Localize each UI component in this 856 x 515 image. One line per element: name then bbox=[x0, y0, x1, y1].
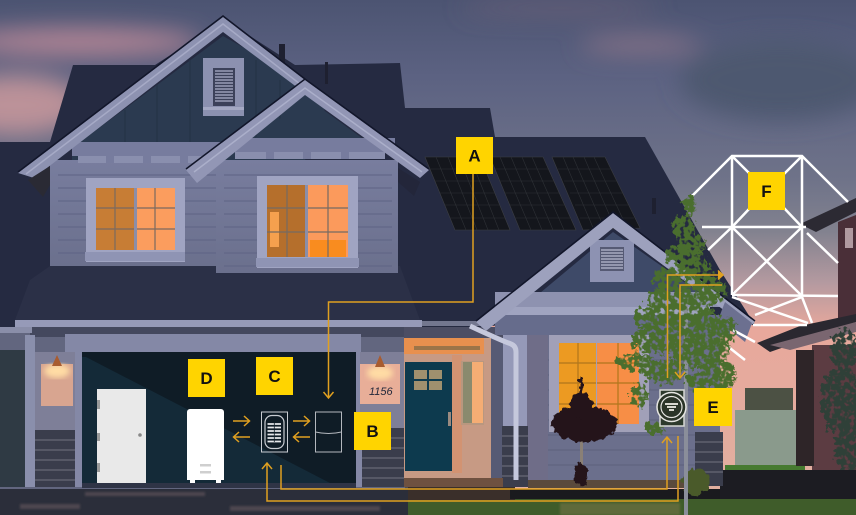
right stone base bbox=[362, 428, 405, 487]
label B bbox=[354, 412, 391, 450]
label D bbox=[188, 359, 225, 397]
neighbouring house on the right bbox=[725, 198, 856, 477]
porch floor bbox=[404, 478, 698, 488]
arrows between battery and inverter bbox=[233, 416, 250, 442]
entry wall bbox=[404, 327, 503, 480]
lower main roof bbox=[15, 266, 420, 320]
electric meter E bbox=[657, 390, 686, 426]
small garden shrub bbox=[683, 468, 709, 496]
main gable wall bbox=[72, 36, 330, 160]
porch gable vent bbox=[590, 240, 634, 282]
porch gable fascia bbox=[476, 212, 755, 331]
porch window bbox=[549, 335, 649, 432]
left wall lamp panel bbox=[35, 352, 75, 430]
inverter C bbox=[262, 412, 288, 452]
downspout bbox=[470, 326, 516, 480]
porch roof right underside bbox=[718, 302, 752, 342]
porch column stone base bbox=[502, 426, 528, 487]
upper lines to grid zone bbox=[668, 270, 723, 378]
garage opening bbox=[82, 352, 356, 488]
solar panels A bbox=[425, 157, 640, 230]
tree at right edge bbox=[822, 328, 856, 471]
label F: F bbox=[761, 182, 772, 201]
ornamental shrub bbox=[551, 378, 617, 486]
label B: B bbox=[366, 422, 379, 441]
front gable trim beam bbox=[235, 138, 395, 159]
porch column bbox=[503, 334, 527, 426]
grid connection zone F bbox=[692, 156, 848, 360]
service panel B bbox=[316, 412, 342, 452]
label A bbox=[456, 137, 493, 174]
label A: A bbox=[468, 146, 481, 166]
porch right stone base bbox=[695, 432, 723, 486]
roof underside left bbox=[28, 166, 50, 197]
main gable fascia bbox=[18, 16, 305, 178]
arrow from solar panels to service panel bbox=[324, 172, 473, 398]
main gable siding bbox=[50, 160, 220, 266]
line from inverter to meter bbox=[281, 437, 672, 489]
left neighbouring garage door bbox=[0, 335, 35, 487]
front door bbox=[405, 362, 452, 471]
label C: C bbox=[268, 367, 281, 386]
front tree bbox=[617, 195, 738, 515]
label E: E bbox=[707, 398, 719, 417]
porch wall siding bbox=[503, 334, 720, 480]
front gable fascia bbox=[186, 79, 429, 183]
main gable trim beam bbox=[72, 142, 222, 163]
roof underside right bbox=[398, 168, 420, 196]
garden and ground bbox=[0, 470, 856, 515]
left stone base bbox=[35, 430, 75, 487]
interior door bbox=[97, 389, 146, 483]
upper roof bbox=[0, 20, 755, 335]
attic vent bbox=[203, 58, 244, 116]
ground floor wall bbox=[0, 327, 408, 489]
label C bbox=[256, 357, 293, 395]
line from meter to inverter bbox=[262, 436, 678, 501]
battery D bbox=[187, 409, 224, 483]
front gable siding bbox=[216, 160, 398, 273]
door sidelight bbox=[461, 361, 484, 425]
front gable wall bbox=[255, 98, 362, 138]
upper right window bbox=[256, 176, 359, 268]
main eave gutter bbox=[0, 320, 482, 333]
right wall lamp and house number: 1156 bbox=[369, 386, 394, 398]
roof vent pipes bbox=[279, 44, 656, 214]
label E bbox=[694, 388, 732, 426]
porch beam bbox=[495, 292, 730, 335]
right wall lamp and house number bbox=[360, 352, 405, 428]
label F bbox=[748, 172, 785, 210]
upper left window bbox=[85, 178, 185, 262]
garage surround bbox=[65, 334, 362, 487]
label D: D bbox=[200, 369, 213, 388]
entry transom bbox=[404, 338, 484, 354]
porch gable wall bbox=[540, 232, 700, 293]
arrows between inverter and panel bbox=[293, 416, 310, 442]
